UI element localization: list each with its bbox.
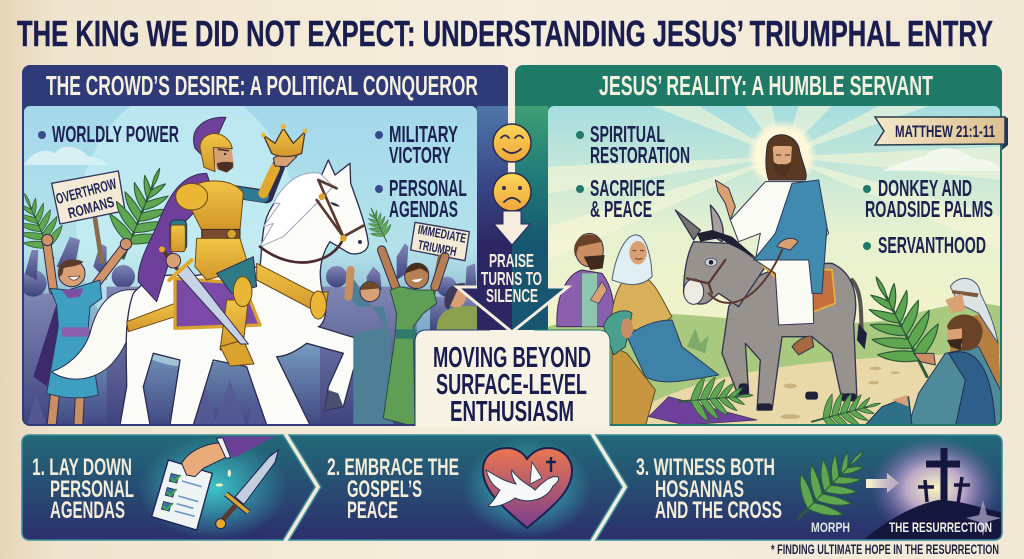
center flow: praise to silence xyxy=(457,65,568,332)
bullet: personal agendas xyxy=(375,175,467,222)
bullet: personal agendas: PERSONAL xyxy=(389,175,467,201)
callout: moving beyond surface-level enthusiasm: MOVING BEYOND xyxy=(433,342,591,374)
step 2: embrace the gospel's peace xyxy=(289,435,622,540)
step 1: lay down personal agendas: 1. LAY DOWN xyxy=(32,454,132,481)
panel: jesus' reality xyxy=(515,65,1008,442)
bullet: worldly power xyxy=(38,121,179,147)
icon: hand holding checklist xyxy=(152,437,274,530)
arrow: small white down arrow xyxy=(494,211,530,245)
icon: crosses on hill at dawn xyxy=(866,437,1001,539)
step 2: embrace the gospel's peace: GOSPEL’S xyxy=(347,476,422,503)
step 2: embrace the gospel's peace: 2. EMBRACE THE xyxy=(327,454,459,481)
panel: the crowd's desire xyxy=(5,65,510,427)
bullet: spiritual restoration xyxy=(576,121,690,168)
illustration: conqueror on white horse with crowd xyxy=(24,106,477,424)
text: praise turns to silence xyxy=(481,251,542,306)
bullet: sacrifice and peace xyxy=(576,175,665,222)
step 3: witness both hosannas and the cross: HOSANNAS xyxy=(655,476,744,503)
icon: sad face xyxy=(493,173,531,211)
sign: overthrow romans: OVERTHROW xyxy=(54,175,119,208)
callout: moving beyond surface-level enthusiasm: ENTHUSIASM xyxy=(450,396,574,428)
bullet: spiritual restoration: RESTORATION xyxy=(590,142,690,168)
step 1: lay down personal agendas: AGENDAS xyxy=(50,497,125,524)
sign: immediate triumph: TRIUMPH xyxy=(417,237,458,259)
icon: sword xyxy=(216,450,278,529)
step 3: witness both hosannas and the cross xyxy=(596,430,1002,540)
bullet: spiritual restoration: SPIRITUAL xyxy=(590,121,665,147)
text: praise turns to silence: PRAISE xyxy=(489,251,534,271)
bullet: donkey and roadside palms xyxy=(863,175,993,222)
callout: moving beyond surface-level enthusiasm: SURFACE-LEVEL xyxy=(436,369,587,401)
illustration: jesus on donkey with followers xyxy=(548,106,1002,442)
step 2: embrace the gospel's peace: PEACE xyxy=(347,497,398,524)
label: morph: MORPH xyxy=(811,519,850,535)
text: praise turns to silence: SILENCE xyxy=(486,286,538,306)
bullet: military victory: MILITARY xyxy=(389,121,458,147)
bullet: worldly power: WORLDLY POWER xyxy=(52,121,179,147)
banner: scripture reference xyxy=(875,116,1008,150)
bullet: sacrifice and peace: & PEACE xyxy=(590,196,652,222)
sign: overthrow romans xyxy=(54,175,123,224)
step 1: lay down personal agendas xyxy=(22,435,315,540)
step 3: witness both hosannas and the cross: 3. WITNESS BOTH xyxy=(636,454,775,481)
panel heading: crowd's desire: THE CROWD’S DESIRE: A POLITICAL CONQUEROR xyxy=(46,70,478,101)
arrow: morph arrow xyxy=(866,473,899,493)
sign: immediate triumph xyxy=(414,222,468,261)
bullet: servanthood xyxy=(863,232,986,258)
icon: happy face xyxy=(493,124,531,162)
big down arrow into takeaway xyxy=(457,287,568,332)
sign: immediate triumph: IMMEDIATE xyxy=(417,222,468,246)
bullet: military victory xyxy=(375,121,458,168)
text: praise turns to silence: TURNS TO xyxy=(481,269,542,289)
bullet: personal agendas: AGENDAS xyxy=(389,196,458,222)
bullet: military victory: VICTORY xyxy=(389,142,451,168)
action band: three steps xyxy=(22,430,1002,540)
step 1: lay down personal agendas: PERSONAL xyxy=(50,476,134,503)
icon: heart with dove and cross xyxy=(483,448,572,528)
icon: palm frond xyxy=(776,430,885,540)
sign: overthrow romans: ROMANS xyxy=(66,194,116,222)
bullet: sacrifice and peace: SACRIFICE xyxy=(590,175,665,201)
step 3: witness both hosannas and the cross: AND THE CROSS xyxy=(655,497,782,524)
callout: moving beyond surface-level enthusiasm xyxy=(415,330,610,428)
